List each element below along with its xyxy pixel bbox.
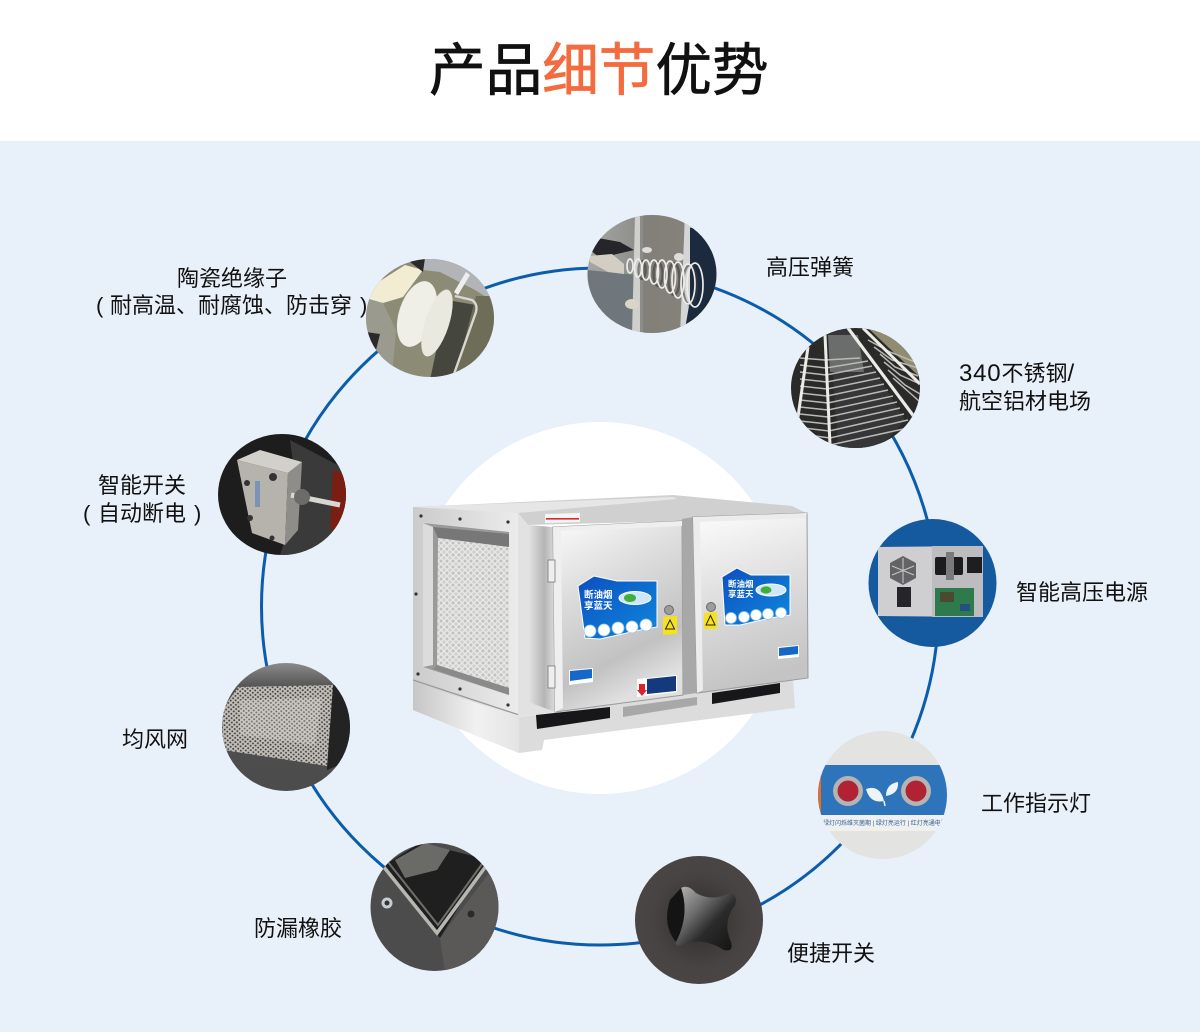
label: electric field plates: 航空铝材电场: [959, 389, 1091, 414]
label: smart switch: 智能开关: [98, 473, 186, 498]
indicator lights: [833, 776, 931, 806]
label: smart switch: ): [194, 501, 201, 526]
detail photo: air distribution mesh: [222, 663, 351, 792]
detail photo: ceramic insulator: [366, 258, 494, 380]
warning label right: [704, 612, 717, 629]
fan vent: [890, 556, 916, 585]
sticker left: 断油烟: [584, 589, 613, 601]
top bracket: [423, 259, 489, 296]
label: ceramic insulator: (: [96, 293, 104, 318]
label: ceramic insulator: ): [360, 293, 367, 318]
cabinet left face: [413, 507, 519, 753]
sticker right: [722, 568, 790, 625]
label: smart switch: (: [83, 501, 91, 526]
power unit chassis: [878, 546, 932, 616]
block holes: [244, 473, 277, 540]
detail photo: handle knob: [635, 856, 764, 985]
small module: [967, 557, 982, 573]
warning label left: [663, 616, 677, 635]
small indicator labels: [569, 645, 799, 685]
base left: [413, 682, 519, 753]
label: ceramic insulator: [96, 266, 367, 318]
indicator caption: 绿灯闪烁维灭菌期 | 绿灯亮运行 | 红灯亮通电服务: [823, 819, 953, 827]
left door: [553, 521, 683, 712]
label: ceramic insulator: 耐高温、耐腐蚀、防击穿: [110, 293, 352, 318]
label: electric field plates: [959, 360, 1091, 414]
label: mesh: 均风网: [122, 727, 188, 752]
door locks: [664, 602, 716, 614]
dark lower panel: [440, 874, 498, 970]
title: 产品细节优势: [429, 39, 769, 102]
filter opening frame: [423, 523, 509, 695]
detail photo: work indicator lights: [818, 731, 953, 859]
block blue print: [255, 481, 260, 507]
detail photo: electric field plates: [791, 328, 925, 448]
cabinet top: [413, 495, 806, 525]
base slots: [536, 707, 610, 729]
label: rubber seal: 防漏橡胶: [254, 916, 342, 941]
screw: [382, 898, 392, 908]
top arrow label: [545, 513, 580, 523]
sticker right: 享蓝天: [728, 589, 754, 599]
seal edges: [383, 866, 486, 933]
central white circle: [414, 422, 786, 794]
right dark panel: [430, 301, 474, 377]
plate ribs: [800, 340, 920, 445]
connecting ring: [262, 268, 938, 945]
centre post: [682, 517, 697, 695]
front frame: [518, 513, 555, 717]
detail photo: smart high-voltage power supply: [868, 519, 998, 648]
leaf icon: [866, 782, 898, 806]
outlet label: [637, 675, 677, 697]
label: smart switch: 自动断电: [98, 501, 186, 526]
label: indicator lights: 工作指示灯: [981, 791, 1091, 816]
sticker left: [578, 576, 657, 639]
filter mesh: [437, 538, 509, 688]
bolts: [642, 247, 652, 253]
label: power supply: 智能高压电源: [1016, 580, 1148, 605]
frame rivets: [414, 514, 510, 707]
hinges: [548, 560, 555, 582]
label: ceramic insulator: 陶瓷绝缘子: [177, 266, 287, 291]
left door hinge side: [528, 525, 555, 712]
ceramic discs: [436, 296, 437, 297]
label: smart switch: [83, 473, 201, 526]
base front: [519, 680, 795, 753]
spring coils: [638, 261, 697, 305]
rods: [798, 328, 920, 445]
detail photo: smart switch: [218, 434, 347, 556]
detail photo: high-voltage spring: [587, 215, 720, 335]
plunger rod: [291, 495, 340, 505]
sticker left: 享蓝天: [584, 600, 613, 612]
metal block: [237, 460, 288, 545]
transformer: [935, 557, 963, 575]
cream panel: [366, 265, 423, 303]
label: high-voltage spring: 高压弹簧: [766, 255, 854, 280]
right door: [693, 513, 808, 693]
circuit board: [935, 588, 974, 616]
data plate: [897, 587, 911, 607]
label: electric field plates: 340不锈钢/: [959, 360, 1074, 387]
sticker right: 断油烟: [728, 579, 754, 589]
label: knob: 便捷开关: [787, 941, 875, 966]
central product: purifier cabinet: [413, 495, 808, 753]
detail photo: leak-proof rubber seal: [370, 843, 499, 972]
